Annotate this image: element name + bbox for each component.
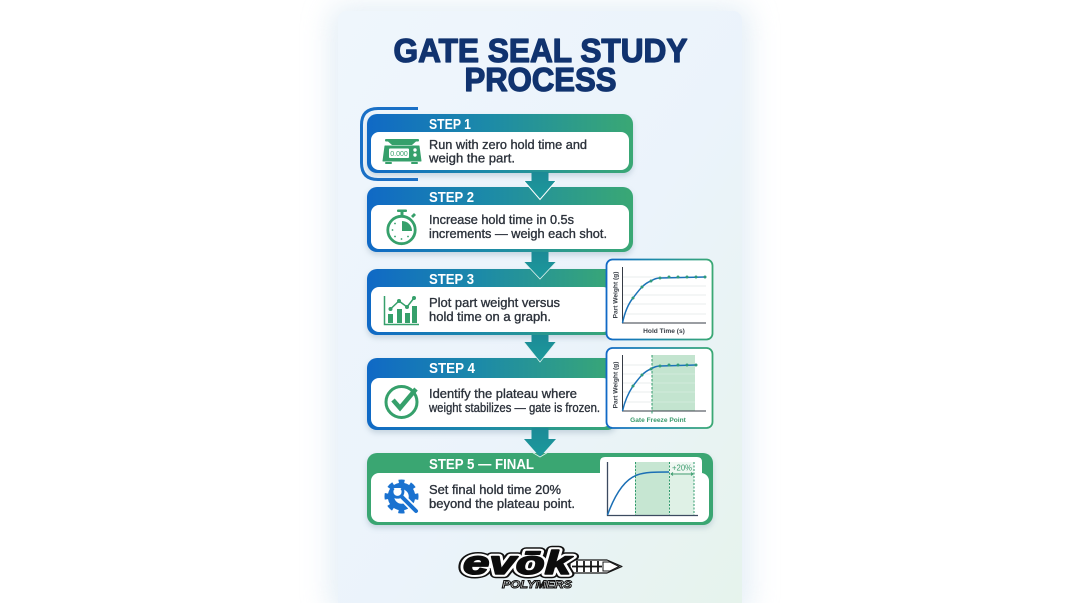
step 4 text [428, 386, 600, 415]
chart: part weight versus hold time: Hold Time (s) [643, 328, 685, 335]
arrow: step 3 to step 4 [524, 335, 556, 362]
icon: growth chart [384, 296, 419, 324]
step 1 text [428, 137, 587, 166]
panel: step 3 [367, 269, 617, 338]
panel: background card [338, 11, 742, 603]
icon: stopwatch [388, 210, 416, 244]
title [394, 32, 688, 98]
icon: weighing scale: 0.000 [390, 151, 408, 158]
title: GATE SEAL STUDY [394, 32, 688, 69]
icon: weighing scale [383, 139, 421, 164]
step 3 text [429, 295, 560, 324]
logo wordmark [463, 544, 573, 581]
icon: gear and wrench [387, 482, 416, 511]
step 4 text: Identify the plateau where [429, 386, 577, 401]
logo wordmark: evōk [463, 544, 573, 581]
logo: evok polymers [463, 544, 622, 591]
step 1 label: STEP 1 [429, 117, 471, 133]
panel: step 2 [367, 187, 633, 255]
step 2 label: STEP 2 [429, 190, 474, 206]
step 5 label: STEP 5 — FINAL [429, 457, 534, 473]
step 2 text: increments — weigh each shot. [429, 226, 607, 241]
arrow: step 4 to step 5 [524, 428, 556, 457]
arrow: step 1 to step 2 [524, 172, 556, 200]
title: PROCESS [464, 61, 616, 98]
chart: plateau and gate freeze point: Part Weight (g) [612, 362, 620, 408]
panel: step 4 [367, 358, 617, 433]
chart: final hold time plus 20 percent [600, 457, 702, 516]
chart: plateau and gate freeze point: Gate Freeze Point [630, 417, 687, 424]
step 3 text: hold time on a graph. [429, 309, 551, 324]
logo wordmark: evōk [463, 544, 573, 581]
arrow: step 2 to step 3 [524, 252, 556, 279]
chart: final hold time plus 20 percent: +20% [672, 462, 692, 472]
logo screw [570, 560, 622, 573]
step 4 text: weight stabilizes — gate is frozen. [428, 400, 600, 415]
panel: step 5 final [367, 453, 713, 528]
chart: plateau and gate freeze point [606, 348, 712, 428]
step 1 text: Run with zero hold time and [429, 137, 587, 152]
chart: part weight versus hold time [606, 260, 712, 340]
icon: check circle [386, 386, 417, 418]
step 5 text: beyond the plateau point. [429, 496, 575, 511]
logo subtitle: POLYMERS [502, 579, 573, 591]
step 5 text [429, 482, 575, 511]
step 5 text: Set final hold time 20% [429, 482, 561, 497]
step 3 text: Plot part weight versus [429, 295, 560, 310]
step 3 label: STEP 3 [429, 272, 474, 288]
panel: step 1 [362, 108, 633, 180]
step 2 text [429, 212, 607, 241]
step 1 text: weigh the part. [428, 150, 515, 166]
chart: part weight versus hold time: Part Weight (g) [612, 272, 620, 318]
step 4 label: STEP 4 [429, 361, 475, 377]
logo wordmark: evōk [463, 544, 573, 581]
step 2 text: Increase hold time in 0.5s [429, 212, 574, 227]
